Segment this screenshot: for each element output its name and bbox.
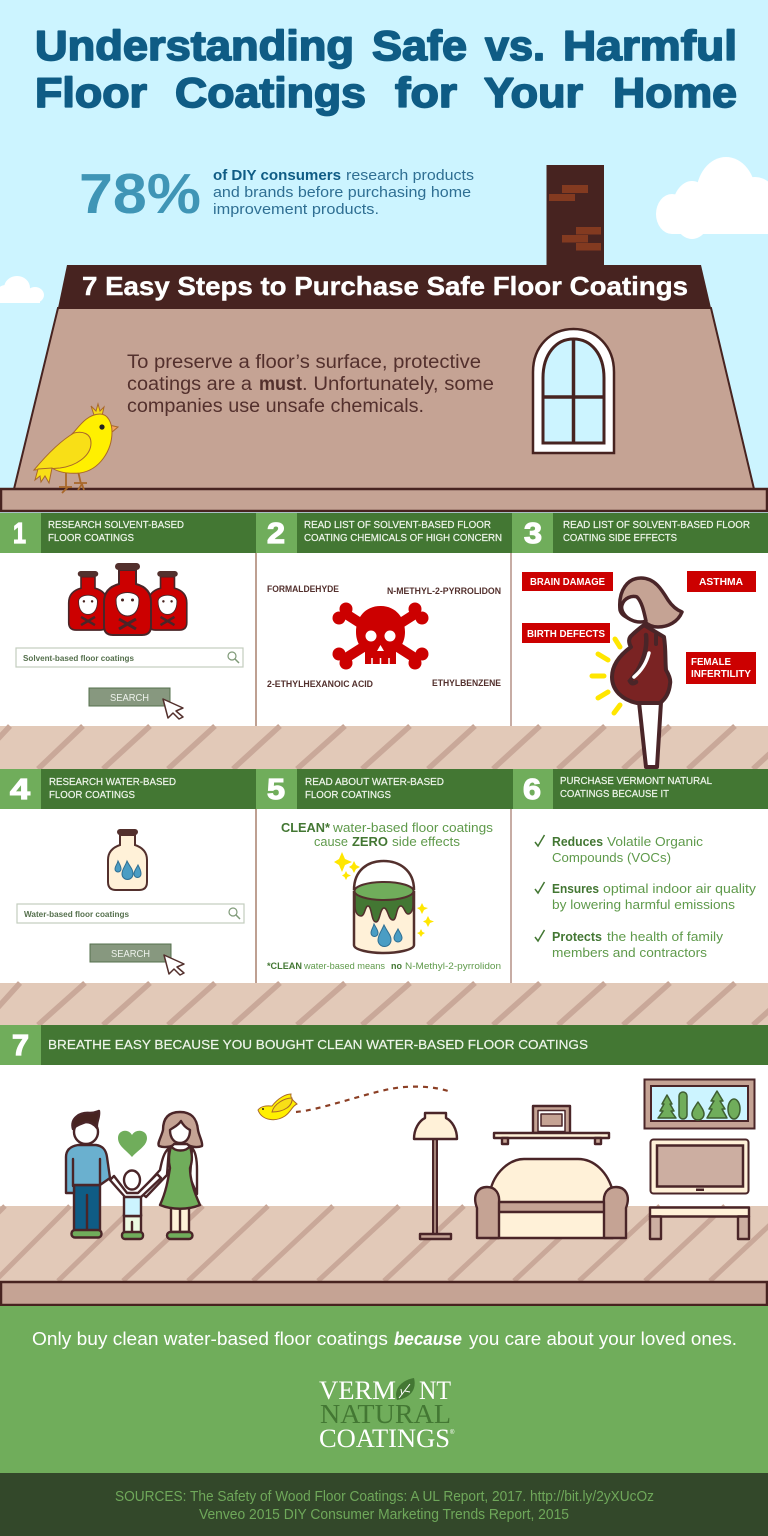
logo: Vermont Natural Coatings: NT	[419, 1376, 451, 1405]
step 6 header: COATINGS BECAUSE IT	[560, 789, 669, 800]
step 5 header	[256, 769, 512, 809]
panel: step 6 benefits: the health of family	[607, 930, 724, 944]
step 2 header: 2	[267, 518, 285, 550]
panel: step 2 chemicals: N-METHYL-2-PYRROLIDON	[387, 586, 501, 596]
statistic: 78 percent: 78%	[79, 162, 201, 226]
panel: step 5 clean coatings: water-based means	[303, 961, 386, 971]
icon: water bottle	[108, 829, 147, 890]
step 3 header: COATING SIDE EFFECTS	[563, 533, 677, 544]
search button: SEARCH	[111, 949, 150, 960]
icon: cursor	[163, 699, 183, 719]
search button	[90, 944, 171, 962]
panel: step 5 clean coatings	[267, 820, 501, 971]
intro text: . Unfortunately, some	[302, 374, 494, 395]
woman	[140, 1112, 202, 1239]
panel: step 6 benefits: by lowering harmful emissions	[552, 898, 735, 912]
label: female infertility	[686, 652, 756, 684]
panel: step 6 benefits	[535, 835, 757, 960]
step 7 header	[0, 1025, 768, 1065]
step 4 header	[0, 769, 256, 809]
statistic: 78 percent: improvement products.	[213, 201, 379, 218]
icon: cursor	[164, 955, 184, 975]
panel: closing message: Only buy clean water-based floor coatings	[32, 1329, 388, 1349]
icon: shelf with frame	[494, 1106, 609, 1144]
step 1 header	[0, 513, 256, 553]
label: asthma	[687, 571, 756, 592]
panel: step 6 benefits: Protects	[552, 930, 602, 944]
icon: television	[650, 1140, 748, 1194]
panel: step 5 clean coatings: cause	[314, 834, 348, 849]
intro text: must	[259, 374, 303, 395]
floor strip 3	[0, 1206, 768, 1281]
title: for	[395, 69, 457, 116]
step 3 header: 3	[524, 518, 542, 550]
step 2 header: COATING CHEMICALS OF HIGH CONCERN	[304, 533, 502, 544]
step 7 header: 7	[12, 1030, 29, 1062]
search button	[89, 688, 170, 706]
label: brain damage: BRAIN DAMAGE	[530, 577, 605, 588]
panel: step 2 chemicals	[267, 584, 501, 689]
label: birth defects: BIRTH DEFECTS	[527, 629, 605, 640]
intro text	[127, 352, 494, 417]
panel: sources	[0, 1473, 768, 1536]
label: brain damage	[522, 572, 613, 591]
panel: closing message	[0, 1306, 768, 1473]
step 2 header	[256, 513, 512, 553]
step 4 header: FLOOR COATINGS	[49, 790, 135, 801]
title: Your	[484, 69, 583, 116]
label: female infertility: INFERTILITY	[691, 669, 751, 680]
step 4 header: 4	[10, 774, 30, 806]
panel: step 5 clean coatings: water-based floor coatings	[332, 820, 494, 835]
icon: sparkles	[334, 852, 434, 937]
panel: step 2 chemicals: 2-ETHYLHEXANOIC ACID	[267, 679, 373, 689]
title: Home	[613, 69, 737, 116]
panel: step 6 benefits: optimal indoor air quality	[603, 882, 757, 896]
panel: closing message: because	[394, 1329, 462, 1349]
panel: step 6 benefits: Compounds (VOCs)	[552, 851, 671, 865]
icon: yellow alert rays	[592, 639, 620, 713]
step 6 header: 6	[523, 774, 541, 806]
icon: yellow bird on roof	[34, 404, 118, 493]
cloud: left	[0, 276, 44, 303]
label: asthma: ASTHMA	[699, 577, 743, 588]
statistic: 78 percent: of DIY consumers	[213, 167, 341, 184]
step 1 header: RESEARCH SOLVENT-BASED	[48, 520, 184, 531]
icon: landscape painting	[644, 1080, 754, 1128]
roof	[1, 265, 767, 511]
search box: Water-based floor coatings	[24, 909, 129, 919]
floor strip 2	[0, 983, 768, 1025]
label: birth defects	[522, 623, 610, 643]
title: Safe	[372, 22, 467, 69]
logo: Vermont Natural Coatings	[319, 1376, 455, 1453]
panel: step 5 clean coatings: side effects	[392, 834, 461, 849]
panel: step 6 benefits: Ensures	[552, 882, 599, 896]
logo: Vermont Natural Coatings: COATINGS	[319, 1424, 450, 1453]
step 6 header: PURCHASE VERMONT NATURAL	[560, 776, 712, 787]
panel: step 5 clean coatings: N-Methyl-2-pyrrolidon	[405, 961, 501, 971]
icon: tv table	[650, 1208, 749, 1239]
icon: sofa	[475, 1159, 628, 1238]
panel: sources: Venveo 2015 DIY Consumer Marketing Trends Report, 2015	[199, 1507, 569, 1523]
panel: closing message: you care about your loved ones.	[469, 1329, 737, 1349]
search button: SEARCH	[110, 693, 149, 704]
step 7 header: BREATHE EASY BECAUSE YOU BOUGHT CLEAN WATER-BASED FLOOR COATINGS	[48, 1037, 588, 1052]
icon: skull and crossbones	[332, 602, 428, 670]
bottom ledge	[1, 1282, 767, 1305]
man	[66, 1111, 110, 1238]
logo: Vermont Natural Coatings: VERM	[319, 1376, 396, 1405]
child	[110, 1170, 161, 1239]
panel: step 2 chemicals: FORMALDEHYDE	[267, 584, 339, 594]
panel: step 6 benefits: Reduces	[552, 835, 603, 849]
cloud: right	[656, 157, 768, 239]
icon: poison bottles	[69, 563, 187, 635]
panel: sources: SOURCES: The Safety of Wood Floor Coatings: A UL Report, 2017. http://bit.ly/2yXUcOz	[115, 1489, 654, 1505]
floor strip 1	[0, 726, 768, 769]
search box: Solvent-based floor coatings	[23, 653, 134, 663]
title: vs.	[485, 22, 545, 69]
step 3 header: READ LIST OF SOLVENT-BASED FLOOR	[563, 520, 750, 531]
step 2 header: READ LIST OF SOLVENT-BASED FLOOR	[304, 520, 491, 531]
panel: step 1 bottles and search	[16, 563, 243, 719]
icon: floor lamp	[414, 1113, 457, 1239]
title: Coatings	[175, 69, 366, 116]
logo: Vermont Natural Coatings: NATURAL	[320, 1399, 451, 1429]
icon: paint bucket	[354, 861, 414, 953]
title: Understanding	[35, 22, 354, 69]
step 1 header: FLOOR COATINGS	[48, 533, 134, 544]
title	[35, 22, 737, 116]
label: female infertility: FEMALE	[691, 657, 731, 668]
statistic: 78 percent: and brands before purchasing home	[213, 184, 471, 201]
panel: step 4 bottle and search	[17, 829, 244, 975]
panel: step 2 chemicals: ETHYLBENZENE	[432, 678, 501, 688]
icon: pregnant woman	[612, 578, 682, 767]
search box	[17, 904, 244, 923]
title: Floor	[35, 69, 147, 116]
intro text: To preserve a floor’s surface, protective	[127, 352, 481, 373]
intro text: coatings are a	[127, 374, 252, 395]
statistic: 78 percent	[79, 162, 474, 226]
icon: flying bird	[258, 1094, 297, 1120]
roof heading: 7 Easy Steps to Purchase Safe Floor Coatings	[82, 271, 688, 301]
statistic: 78 percent: research products	[346, 167, 474, 184]
title: Harmful	[563, 22, 737, 69]
panel: step 5 clean coatings: no	[391, 961, 402, 971]
flight path	[296, 1087, 451, 1112]
step 5 header: READ ABOUT WATER-BASED	[305, 777, 444, 788]
step 5 header: FLOOR COATINGS	[305, 790, 391, 801]
panel: step 3 side effects	[522, 571, 756, 767]
chimney	[546, 165, 604, 270]
step 4 header: RESEARCH WATER-BASED	[49, 777, 176, 788]
step 3 header	[512, 513, 768, 553]
panel: step 5 clean coatings: CLEAN*	[281, 820, 331, 835]
step 1 header: 1	[13, 518, 26, 550]
logo: Vermont Natural Coatings: ®	[450, 1429, 455, 1436]
panel: step 5 clean coatings: *CLEAN	[267, 961, 302, 971]
panel: step 6 benefits: members and contractors	[552, 946, 707, 960]
icon: family	[66, 1111, 202, 1239]
panel: step 6 benefits: Volatile Organic	[607, 835, 703, 849]
search box	[16, 648, 243, 667]
step 5 header: 5	[267, 774, 285, 806]
step 6 header	[512, 769, 768, 809]
heart	[118, 1131, 147, 1157]
panel: step 5 clean coatings: ZERO	[352, 834, 388, 849]
window	[533, 329, 614, 453]
intro text: companies use unsafe chemicals.	[127, 396, 424, 417]
